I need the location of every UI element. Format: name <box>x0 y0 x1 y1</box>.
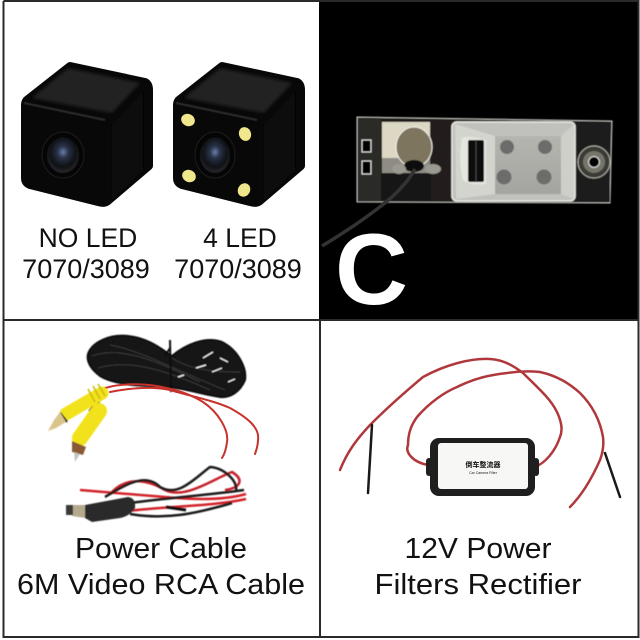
text: video cable label: 6M Video RCA Cable <box>17 569 305 601</box>
panel: filter rectifier <box>340 359 620 601</box>
panel: license plate bracket <box>319 1 638 326</box>
icon: camera with 4 LEDs <box>176 66 301 203</box>
icon: bracket <box>357 117 612 203</box>
text: filters rectifier label: Filters Rectifier <box>374 569 582 601</box>
text: 4 LED model: 7070/3089 <box>174 254 302 284</box>
icon: red trigger wires <box>105 384 258 458</box>
icon: rectifier box: Car Camera Filter <box>469 471 498 475</box>
text: NO LED label: NO LED <box>39 223 137 253</box>
panel: cables <box>17 336 305 601</box>
icon: camera cable <box>322 169 415 246</box>
panel: camera options <box>22 66 302 284</box>
text: power cable label: Power Cable <box>75 533 247 565</box>
icon: rectifier box <box>426 438 539 496</box>
text: version letter C: C <box>335 214 408 326</box>
icon: rectifier wires <box>340 359 620 507</box>
text: 4 LED label: 4 LED <box>203 223 277 253</box>
icon: rectifier box: 倒车整流器 <box>466 460 500 469</box>
icon: coiled black video cable <box>88 336 245 397</box>
text: 12V power label: 12V Power <box>404 533 552 565</box>
icon: DC power cable <box>66 467 246 522</box>
icon: yellow RCA plugs <box>48 384 105 462</box>
text: NO LED model: 7070/3089 <box>22 254 150 284</box>
icon: camera without LED <box>24 66 149 203</box>
